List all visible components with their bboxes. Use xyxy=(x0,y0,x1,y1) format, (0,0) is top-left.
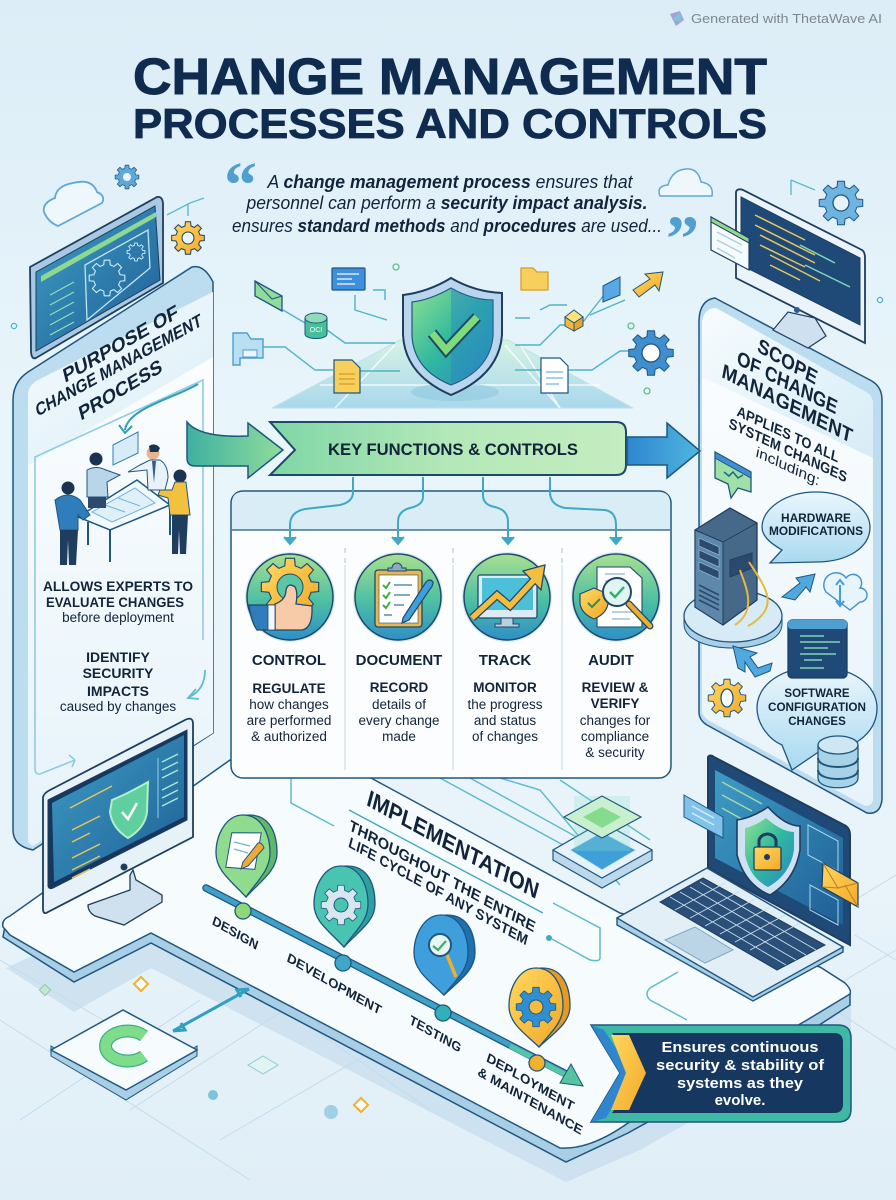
arrow: double headed link xyxy=(173,989,249,1031)
person back left xyxy=(87,452,120,508)
arrow: side return xyxy=(188,670,205,699)
small nodes xyxy=(11,264,883,394)
icon: exchange arrow xyxy=(733,646,772,677)
text: applies to all: including: xyxy=(755,444,821,490)
icon: yellow folder xyxy=(521,268,548,290)
text: applies to all: SYSTEM CHANGES xyxy=(727,416,848,486)
header: purpose: PROCESS xyxy=(76,355,164,425)
bubble: hardware modifications: MODIFICATIONS xyxy=(769,526,863,538)
icon: blue card xyxy=(332,268,365,290)
column: track: TRACK xyxy=(479,652,531,669)
chip stack xyxy=(553,796,652,888)
inner frame xyxy=(35,380,203,774)
icon: cloud top left xyxy=(44,182,103,226)
icon: envelope xyxy=(255,281,282,311)
icon: code card xyxy=(788,620,847,678)
bottom platform: implementation xyxy=(3,760,851,1182)
text: evaluate changes: EVALUATE CHANGES xyxy=(46,594,184,610)
stage: design: DESIGN xyxy=(211,913,260,953)
stage: design xyxy=(211,815,277,953)
quote mark: close: ” xyxy=(666,203,699,276)
icon: database stack xyxy=(818,736,858,788)
header: scope: OF CHANGE xyxy=(735,347,839,419)
icon: yellow gear xyxy=(708,679,746,717)
bubble: software configuration changes xyxy=(757,667,877,770)
column: track: the progress xyxy=(467,697,543,712)
callout: continuous security: Ensures continuous xyxy=(662,1039,818,1056)
icon: envelope xyxy=(822,863,858,907)
panel: purpose of change management process xyxy=(13,267,213,850)
grid node markers xyxy=(39,977,368,1119)
quote mark: open: “ xyxy=(224,149,257,222)
title: CHANGE MANAGEMENT xyxy=(133,48,767,105)
column: audit: changes for xyxy=(580,713,651,728)
bubble: hardware modifications xyxy=(762,492,870,563)
title: PROCESSES AND CONTROLS xyxy=(133,100,767,147)
column: track: and status xyxy=(474,713,536,728)
column: track: MONITOR xyxy=(473,680,537,695)
column: control: CONTROL xyxy=(252,652,326,669)
panel: key functions box xyxy=(231,491,671,778)
callout: continuous security: evolve. xyxy=(715,1092,765,1109)
icon: clipboard and pen xyxy=(353,552,443,642)
column: audit: & security xyxy=(585,745,645,760)
icon: cloud top right xyxy=(659,169,712,196)
text: applies to all: APPLIES TO ALL xyxy=(735,403,840,467)
person back right xyxy=(128,444,168,490)
icon: database: OCI xyxy=(310,327,322,334)
header: purpose: CHANGE MANAGEMENT xyxy=(34,309,204,421)
small platform with sync ring xyxy=(51,1010,197,1100)
section heading: implementation: IMPLEMENTATION xyxy=(364,785,542,904)
monitor: bottom left xyxy=(43,560,193,925)
icon: server tower xyxy=(684,508,782,648)
quote xyxy=(232,171,662,236)
stage: deployment and maintenance: DEPLOYMENT xyxy=(485,1050,576,1114)
stage: testing: TESTING xyxy=(408,1013,463,1056)
laptop shield and lock xyxy=(737,807,800,895)
column: audit xyxy=(571,552,661,760)
column: audit: compliance xyxy=(581,729,649,744)
timeline xyxy=(206,815,584,1138)
icon: yellow chevron xyxy=(611,1035,646,1110)
arrows: banner to function columns xyxy=(284,477,622,544)
stage: development xyxy=(285,866,383,1018)
floor plate xyxy=(272,340,633,408)
icon: cube xyxy=(565,310,583,331)
text: evaluate changes: ALLOWS EXPERTS TO xyxy=(43,578,193,594)
icon: yellow document xyxy=(334,360,360,393)
arrow: blue to scope xyxy=(627,423,700,478)
column: control: how changes xyxy=(249,697,329,712)
column: document: made xyxy=(382,729,416,744)
column: document: details of xyxy=(372,697,426,712)
connector: top left xyxy=(167,198,204,216)
text: evaluate changes: caused by changes xyxy=(60,699,176,714)
header: scope: MANAGEMENT xyxy=(720,360,855,448)
stage: deployment and maintenance xyxy=(476,968,584,1138)
person left xyxy=(55,482,90,565)
callout: continuous security xyxy=(591,1025,851,1122)
bubble: software configuration changes: SOFTWARE xyxy=(784,688,850,700)
column: audit: AUDIT xyxy=(588,652,634,669)
icon: folder xyxy=(233,333,263,365)
column: track xyxy=(462,552,552,744)
column: document: every change xyxy=(358,713,440,728)
quote: personnel can perform a security impact analysis. xyxy=(246,192,648,213)
callout: continuous security: security & stability of xyxy=(656,1057,825,1074)
watermark: Generated with ThetaWave AI xyxy=(691,11,882,26)
panel: scope of change management xyxy=(684,298,882,813)
section heading: implementation xyxy=(347,785,543,949)
icon: document, shield and magnifier xyxy=(571,552,661,642)
column: control: are performed xyxy=(247,713,331,728)
icon: yellow arrow xyxy=(633,272,663,297)
monitor: top right xyxy=(736,189,865,348)
banner: key functions and controls xyxy=(270,422,626,475)
column: control xyxy=(245,552,335,744)
banner: key functions and controls: KEY FUNCTIONS & CONTROLS xyxy=(328,441,578,459)
stage: deployment and maintenance: & MAINTENANCE xyxy=(476,1064,584,1138)
column: document: DOCUMENT xyxy=(356,652,442,669)
icon: sync arrows and cloud xyxy=(782,573,867,610)
arrow: into illustration xyxy=(119,384,198,433)
icon: blue note xyxy=(603,277,620,302)
icon: popup window xyxy=(711,217,749,270)
laptop xyxy=(617,756,858,1001)
text: evaluate changes xyxy=(43,578,193,714)
icon: chat code card xyxy=(715,452,751,498)
text: evaluate changes: before deployment xyxy=(62,610,174,625)
column: track: of changes xyxy=(472,729,538,744)
icon: white document xyxy=(541,358,568,393)
callout: continuous security: systems as they xyxy=(677,1075,804,1092)
bubble: software configuration changes: CHANGES xyxy=(788,716,846,728)
text: evaluate changes: IMPACTS xyxy=(87,683,149,699)
title xyxy=(133,48,767,147)
icon: yellow gear top left xyxy=(172,222,204,254)
icon: database xyxy=(305,313,327,338)
header: scope: SCOPE xyxy=(755,334,820,390)
bubble: software configuration changes: CONFIGURATION xyxy=(768,702,866,714)
quote: ensures standard methods and procedures are used... xyxy=(232,215,662,236)
connector: top right xyxy=(791,180,815,195)
icon: blue gear top right xyxy=(819,181,863,225)
column: control: & authorized xyxy=(251,729,327,744)
column: document xyxy=(353,552,443,744)
bubble: hardware modifications: HARDWARE xyxy=(781,513,851,525)
person right xyxy=(158,470,190,554)
illustration: experts around a plan table xyxy=(55,432,190,565)
quote: A change management process ensures that xyxy=(267,171,633,192)
header: purpose: PURPOSE OF xyxy=(61,300,180,387)
section heading: implementation: LIFE CYCLE OF ANY SYSTEM xyxy=(347,835,529,949)
text: evaluate changes: SECURITY xyxy=(83,665,154,681)
column: audit: REVIEW & xyxy=(582,680,649,695)
column: document: RECORD xyxy=(370,680,428,695)
illustration: central security hub xyxy=(11,264,883,408)
monitor: top left xyxy=(30,197,163,358)
icon: blue tag xyxy=(684,795,723,838)
section heading: implementation: THROUGHOUT THE ENTIRE xyxy=(347,818,537,936)
connector lines on platform xyxy=(291,778,687,1020)
icon: small gear top left xyxy=(115,165,139,189)
column: control: REGULATE xyxy=(252,681,326,696)
text: evaluate changes: IDENTIFY xyxy=(86,649,151,665)
column: audit: VERIFY xyxy=(591,696,639,711)
icon: blue gear xyxy=(629,331,673,375)
icon: monitor with rising arrow xyxy=(462,552,552,642)
icon: gear and thumbs up xyxy=(245,552,335,642)
stage: development: DEVELOPMENT xyxy=(285,950,383,1018)
connector lines xyxy=(263,290,630,371)
arrow: green into banner xyxy=(187,422,283,478)
shield with check xyxy=(403,278,502,401)
stage: testing xyxy=(408,915,475,1056)
